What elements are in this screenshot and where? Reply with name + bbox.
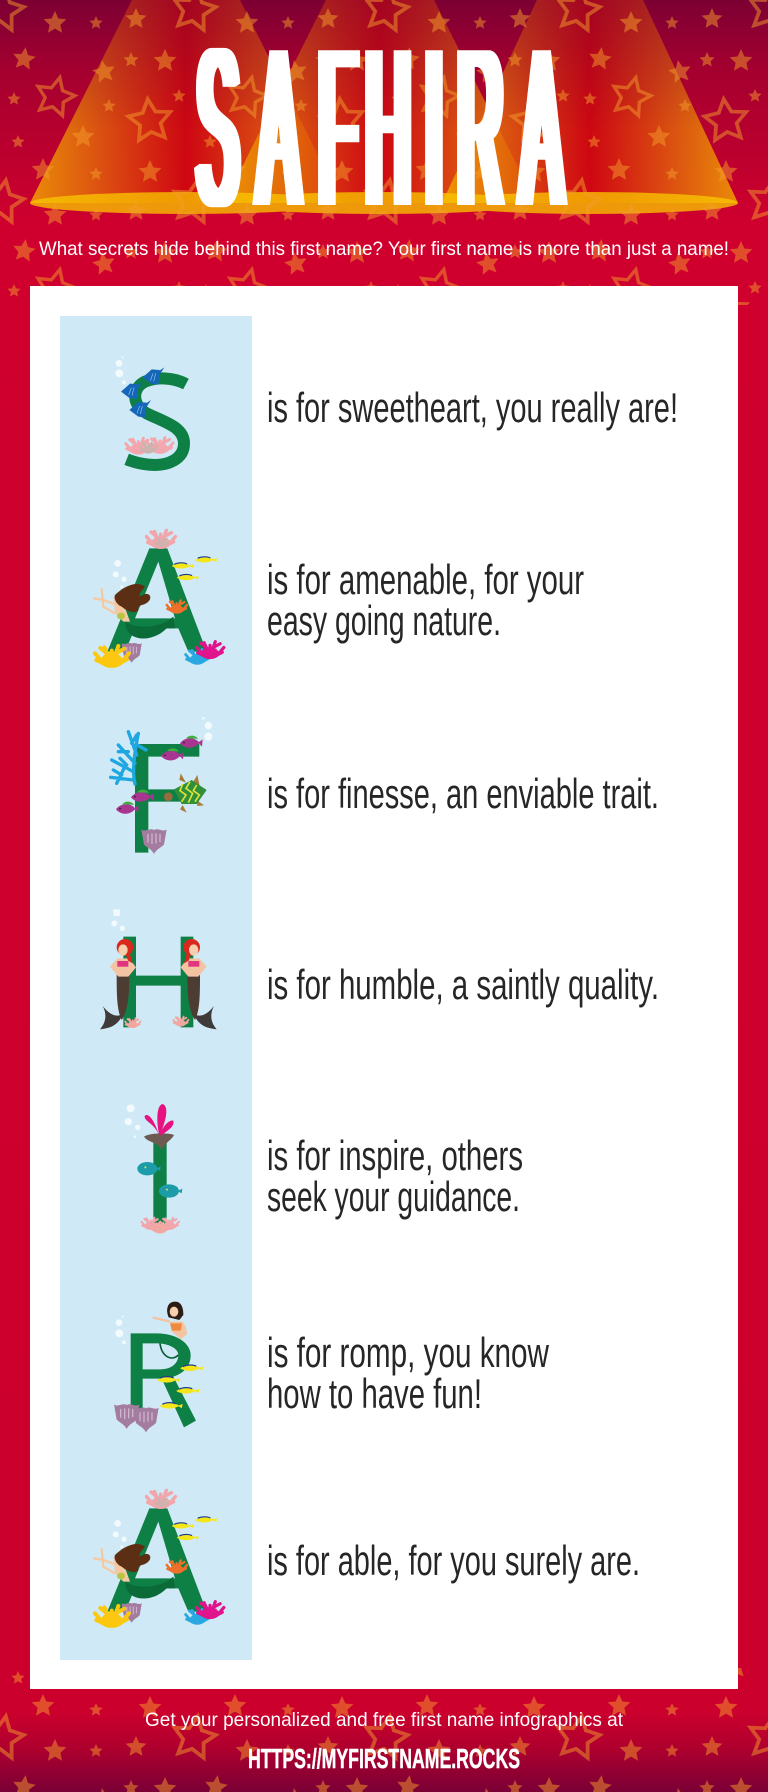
icon: letter I [125,1104,182,1234]
spotlight cone: right [442,0,738,203]
spotlight floor pools [30,192,738,214]
header spotlights [30,0,738,214]
text: A line: is for amenable, for your [267,556,584,603]
icon: letter R [114,1302,203,1432]
text: I line [267,1132,523,1220]
text: R line: how to have fun! [267,1370,482,1417]
text: I line: is for inspire, others [267,1132,523,1179]
panel: letter column [60,316,252,1660]
spotlight cone: centre [224,0,536,203]
icon: letter H [100,909,217,1029]
mermaid: left [100,939,136,1029]
icon: letter F [111,717,212,854]
spotlight shading [30,0,738,203]
text: A line: easy going nature. [267,597,501,644]
subtitle: What secrets hide behind this first name? Your first name is more than just a name! [39,238,729,260]
icon: letter A [93,530,224,668]
text: A line [267,556,584,644]
title: SAFHIRA [197,2,562,253]
footer caption: Get your personalized and free first name infographics at [145,1709,624,1731]
footer url: HTTPS://MYFIRSTNAME.ROCKS [248,1743,520,1774]
panel: white content card [30,286,738,1689]
text: R line: is for romp, you know [267,1329,549,1376]
text: I line: seek your guidance. [267,1173,520,1220]
mermaid: right [181,939,217,1029]
icon: letter A (last) [93,1490,224,1628]
spotlight cone: left [30,0,342,203]
icon: letter S [115,356,186,465]
text: R line [267,1329,549,1417]
